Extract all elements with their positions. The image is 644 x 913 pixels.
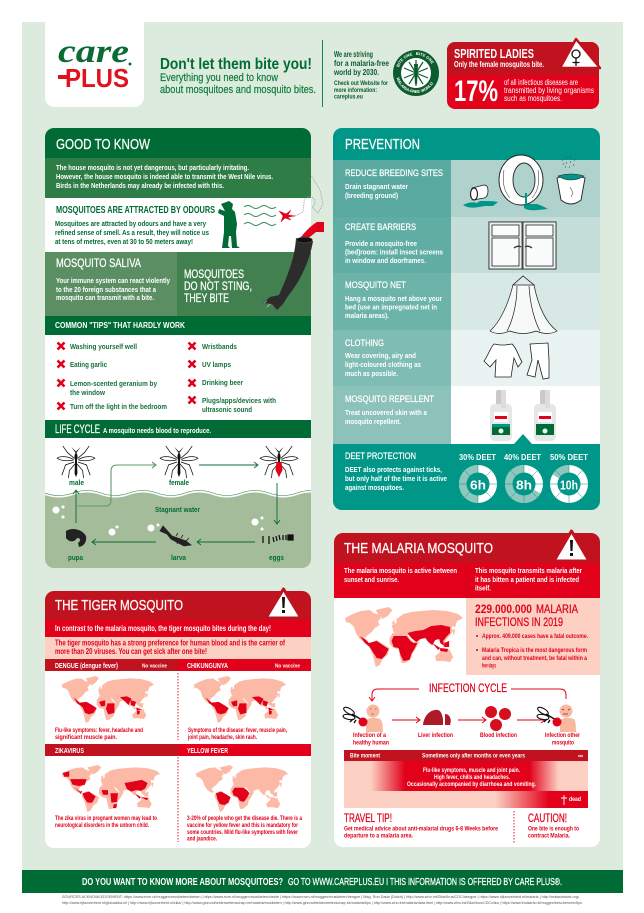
activity text: it has bitten a patient and is infected — [475, 575, 579, 584]
infection cycle labels: Infection of a — [353, 732, 386, 739]
activity text: This mosquito transmits malaria after — [475, 566, 582, 575]
icon: pupa — [66, 529, 86, 547]
heading: malaria mosquito: THE MALARIA MOSQUITO — [344, 540, 493, 557]
intro bar: In contrast to the malaria mosquito, the tiger mosquito bites during the day! — [55, 623, 271, 633]
heading: good to know: GOOD TO KNOW — [56, 136, 151, 153]
icon: odour waves — [244, 206, 276, 226]
badge: malaria-free world: BITE ONE BITE ONE — [396, 52, 434, 68]
panel: prevention — [333, 128, 600, 510]
footer banner — [22, 870, 623, 893]
list: tips that do not work: UV lamps — [202, 360, 231, 369]
saliva section — [45, 252, 311, 316]
activity text — [334, 563, 600, 598]
icon: eggs — [263, 535, 293, 544]
row: mosquito net: bed (use an impregnated net in — [345, 302, 437, 312]
list: tips that do not work: Plugs/apps/devices with — [202, 396, 276, 405]
disease: dengue: No vaccine — [142, 664, 167, 670]
callout: spirited ladies — [447, 39, 600, 109]
travel tip: Get medical advice about anti-malarial drugs 6-8 Weeks before — [344, 826, 498, 832]
life cycle labels: pupa — [68, 555, 83, 562]
life cycle labels: female — [169, 480, 189, 487]
row: deet protection — [333, 434, 600, 510]
odours section: at tens of metres, even at 30 to 50 meters away! — [55, 237, 193, 246]
timeline: Bite moment — [350, 754, 380, 760]
heading: prevention: PREVENTION — [345, 136, 420, 153]
gauge: 10 hours — [550, 465, 588, 503]
row: clothing: Wear covering, airy and — [345, 351, 416, 360]
row: mosquito repellent: Treat uncovered skin with a — [345, 408, 428, 417]
row: reduce breeding sites: (breeding ground) — [345, 191, 398, 200]
disease: yellow fever — [178, 744, 311, 842]
saliva section: DO NOT STING, — [184, 279, 252, 293]
odours section — [55, 205, 215, 246]
row: mosquito net: Hang a mosquito net above your — [345, 294, 442, 303]
icon: clothing — [484, 343, 549, 379]
timeline — [344, 750, 588, 808]
timeline: dead — [569, 796, 581, 803]
timeline: Sometimes only after months or even years — [422, 754, 526, 760]
infections statistic: Approx. 409.000 cases have a fatal outcome. — [482, 633, 588, 640]
title: Don't let them bite you! — [160, 56, 312, 73]
row: mosquito repellent — [333, 386, 600, 444]
disease: yellow fever: YELLOW FEVER — [187, 748, 228, 755]
icon: female mosquito — [160, 446, 198, 478]
panel: malaria mosquito — [334, 533, 600, 847]
heading: prevention — [333, 128, 600, 160]
sources — [62, 895, 582, 905]
callout: spirited ladies: 17% — [454, 75, 498, 108]
row: deet protection: DEET PROTECTION — [345, 451, 416, 462]
callout: spirited ladies: such as mosquitoes. — [504, 94, 562, 103]
malaria-free text: for a malaria-free — [334, 59, 389, 68]
malaria-free text — [333, 50, 389, 100]
disease: chikungunya: No vaccine — [275, 664, 300, 670]
row: clothing: light-coloured clothing as — [345, 360, 421, 369]
life cycle labels: male — [69, 480, 84, 487]
caution — [528, 813, 579, 840]
caution: CAUTION! — [528, 813, 567, 825]
travel tip: TRAVEL TIP! — [344, 813, 392, 825]
row: deet protection: against mosquitoes. — [345, 483, 404, 492]
list: tips that do not work: Turn off the light in the bedroom — [70, 402, 167, 411]
list: tips that do not work: Eating garlic — [70, 360, 107, 369]
icon: blood cells — [485, 706, 511, 731]
disease: chikungunya: Symptoms of the disease: fever, muscle pain, — [188, 727, 287, 734]
callout: spirited ladies: Only the female mosquitos bite. — [454, 60, 544, 69]
gauge: 10 hours: 10h — [560, 478, 578, 492]
infection cycle labels: Liver infection — [418, 732, 453, 739]
row: mosquito net — [333, 273, 451, 330]
intro text: The house mosquito is not yet dangerous, but particularly irritating. — [56, 163, 249, 172]
icon: mosquito net — [490, 276, 557, 334]
disease: yellow fever: vaccine for yellow fever and this is mandatory for — [187, 822, 298, 829]
row: clothing: much as possible. — [345, 369, 398, 378]
heading: infection cycle: INFECTION CYCLE — [429, 683, 507, 695]
heading: tiger mosquito: THE TIGER MOSQUITO — [55, 597, 183, 614]
saliva section: MOSQUITO SALIVA — [56, 258, 141, 270]
malaria-free text: careplus.eu — [334, 94, 363, 100]
row: clothing: CLOTHING — [345, 338, 384, 349]
malaria-free text: world by 2030. — [333, 68, 379, 77]
infections statistic: INFECTIONS IN 2019 — [475, 615, 563, 629]
row: create barriers: Provide a mosquito-free — [345, 239, 417, 248]
list: tips that do not work: Washing yourself well — [70, 342, 137, 351]
life cycle heading: A mosquito needs blood to reproduce. — [103, 426, 211, 435]
timeline: High fever, chills and headaches. — [434, 774, 510, 781]
infections statistic: and can, without treatment, be fatal within a — [482, 655, 587, 662]
row: deet protection: 30% DEET — [459, 452, 497, 462]
row: clothing — [333, 330, 600, 386]
saliva section: Your immune system can react violently — [56, 276, 171, 285]
saliva section: mosquito can transmit with a bite. — [56, 293, 154, 302]
icon: liver — [423, 710, 451, 725]
badge: malaria-free world — [393, 50, 439, 96]
list: tips that do not work — [58, 342, 276, 414]
odours section: MOSQUITOES ARE ATTRACTED BY ODOURS — [56, 205, 215, 216]
disease: dengue: DENGUE (dengue fever) — [55, 663, 118, 670]
tips heading: COMMON "TIPS" THAT HARDLY WORK — [55, 321, 185, 330]
footer banner: DO YOU WANT TO KNOW MORE ABOUT MOSQUITOES? — [82, 877, 283, 888]
preference text: The tiger mosquito has a strong preference for human blood and is the carrier of — [55, 638, 285, 648]
disease: zika: ZIKAVIRUS — [55, 748, 84, 755]
list: tips that do not work: the window — [70, 388, 105, 397]
tips heading — [45, 316, 311, 335]
saliva section: THEY BITE — [184, 291, 229, 305]
preference text — [45, 637, 311, 659]
life cycle labels — [68, 480, 284, 562]
row: create barriers: (bed)room: install insect screens — [345, 248, 443, 256]
row: create barriers — [333, 217, 600, 273]
disease: zika — [45, 744, 178, 829]
icon: warning triangle — [266, 589, 301, 618]
caution: contract Malaria. — [528, 832, 570, 840]
activity text: sunset and sunrise. — [344, 575, 399, 584]
infection cycle labels: healthy human — [353, 740, 389, 746]
malaria-free text: more information: — [334, 88, 377, 94]
icon: mosquito proboscis — [263, 222, 324, 310]
gauge: 8 hours: 8h — [516, 478, 532, 492]
sources: http://www.rijksoverheid.nl/globalzika.nl/ | http://www.rijksoverheid.nl/zika/ | http://www.gezondheidenwetenschap.be/malaria/muskieten | http://www.gezondheidenwetenschap.be/malaria/tips | http://www.who.int/malaria/data.html | http://www.who.int/ZikaVirus/CDC/zika | https://www.thuisarts.nl/muggen/beschermen/tips — [62, 901, 582, 905]
icon: window — [489, 222, 556, 269]
badge: malaria-free world: MALARIA-FREE WORLD — [396, 77, 433, 93]
odours section: Mosquitoes are attracted by odours and have a very — [55, 219, 207, 228]
row: reduce breeding sites: REDUCE BREEDING SITES — [345, 168, 443, 179]
row: deet protection: DEET also protects against ticks, — [345, 465, 442, 474]
disease: dengue: Flu-like symptoms: fever, headache and — [55, 727, 143, 734]
stagnant water: Stagnant water — [155, 505, 200, 514]
disease: yellow fever: some countries. Mild flu-like symptoms with fever — [187, 829, 298, 836]
logo: Care Plus — [45, 22, 144, 107]
callout: spirited ladies: SPIRITED LADIES — [454, 46, 534, 61]
sources: SOURCES ACKNOWLEDGEMENT: https://www.rivm.nl/muggen/muskieten/steken | https://www.rivm.nl/muggen/muskieten/ziekte | https://www.rivm.nl/muggen/muskieten/dengue | Mag. Ron Dada (Dutch) | http://www.who.int/ZikaVirus/CDC/dengue | https://www.rijksoverheid.nl/malaria | http://malariafacts.org/ — [62, 895, 579, 899]
timeline: Flu-like symptoms, muscle and joint pain. — [423, 767, 520, 774]
disease: dengue — [45, 659, 178, 741]
travel tip — [344, 813, 498, 840]
activity text: The malaria mosquito is active between — [344, 566, 457, 575]
icon: larva — [160, 526, 191, 546]
preference text: more than 20 viruses. You can get sick after one bite! — [55, 647, 207, 656]
malaria-free text: We are striving — [334, 50, 373, 59]
infection cycle labels: Infection other — [545, 732, 580, 739]
icon: female symbol warning triangle — [560, 39, 600, 68]
life cycle heading: LIFE CYCLE — [55, 424, 100, 436]
intro text: However, the house mosquito is indeed able to transmit the West Nile virus. — [56, 172, 273, 181]
icon: male mosquito — [57, 446, 95, 478]
icon: odour mosquito and flight path — [279, 175, 323, 222]
disease: chikungunya: CHIKUNGUNYA — [187, 663, 228, 670]
gauge: 6 hours — [459, 465, 497, 503]
saliva section: to the 20 foreign substances that a — [56, 285, 157, 294]
infection cycle labels: Blood infection — [480, 732, 517, 739]
row: mosquito net: malaria areas). — [345, 311, 389, 320]
travel tip: departure to a malaria area. — [344, 832, 413, 840]
infections statistic — [466, 598, 600, 675]
intro bar — [45, 620, 311, 637]
icon: healthy human bitten — [343, 704, 383, 732]
list: tips that do not work: Lemon-scented geranium by — [70, 379, 158, 388]
stagnant water — [45, 490, 325, 568]
activity text: itself. — [475, 584, 491, 592]
odours section: refined sense of smell. As a result, they will notice us — [55, 228, 209, 237]
list: tips that do not work: Drinking beer — [202, 378, 243, 387]
infection cycle labels — [353, 732, 580, 746]
title — [160, 56, 316, 96]
icon: person smelling — [218, 201, 240, 248]
intro text: Birds in the Netherlands may already be infected with this. — [56, 181, 224, 190]
life cycle heading — [45, 420, 311, 438]
row: deet protection: 50% DEET — [550, 452, 589, 462]
saliva section: MOSQUITOES — [184, 267, 244, 281]
gauge: 6 hours: 6h — [470, 478, 486, 492]
caution: One bite is enough to — [528, 826, 579, 832]
row: mosquito net: MOSQUITO NET — [345, 280, 406, 291]
infection cycle labels: mosquito — [552, 740, 574, 746]
timeline: Occasionally accompanied by diarrhoea and vomiting. — [407, 781, 536, 788]
row: mosquito repellent: mosquito repellent. — [345, 417, 401, 426]
disease: dengue: significant muscle pain. — [55, 734, 117, 741]
disease: zika: neurological disorders in the unborn child. — [55, 822, 149, 829]
disease: zika: The zika virus in pregnant women may lead to — [55, 815, 157, 822]
row: mosquito repellent: MOSQUITO REPELLENT — [345, 394, 434, 405]
timeline: ∞ — [578, 753, 583, 760]
icon: can, tire and pot with water — [463, 155, 585, 210]
intro text — [45, 158, 311, 198]
infections statistic: few days — [482, 662, 496, 670]
logo: Care Plus: care — [58, 34, 129, 70]
map: malaria world map — [334, 598, 466, 675]
icon: malaria warning triangle — [554, 531, 589, 561]
life cycle labels: eggs — [269, 555, 284, 562]
disease: yellow fever: 3-20% of people who get the disease die. There is a — [187, 815, 302, 822]
infections statistic: 229.000.000 — [475, 602, 532, 616]
disease: chikungunya — [178, 659, 311, 741]
row: reduce breeding sites: Drain stagnant water — [345, 182, 408, 191]
heading: malaria mosquito — [334, 533, 600, 563]
list: tips that do not work: ultrasonic sound — [202, 405, 252, 414]
callout: spirited ladies: transmitted by living organisms — [504, 86, 594, 95]
infections statistic: MALARIA — [536, 602, 578, 616]
disease: yellow fever: and jaundice. — [187, 836, 217, 842]
row: deet protection: 40% DEET — [504, 452, 542, 462]
arrows: life cycle — [73, 462, 280, 545]
malaria-free text: Check out Website for — [334, 81, 389, 87]
title: about mosquitoes and mosquito bites. — [160, 84, 316, 96]
arrows: infection cycle — [369, 689, 566, 723]
life cycle labels: larva — [171, 555, 186, 562]
row: create barriers: CREATE BARRIERS — [345, 222, 416, 233]
icon: infected human bitten — [537, 704, 576, 732]
callout: spirited ladies: of all infectious diseases are — [504, 78, 578, 87]
icon: repellent bottles — [490, 390, 556, 441]
gauge: 8 hours — [505, 465, 543, 503]
list: tips that do not work: Wristbands — [202, 342, 237, 351]
logo: Care Plus: PLUS — [65, 63, 129, 93]
row: deet protection: but only half of the time it is active — [345, 474, 447, 483]
disease: chikungunya: joint pain, headache, skin rash. — [187, 734, 257, 741]
title: Everything you need to know — [160, 72, 278, 84]
infections statistic: Malaria Tropica is the most dangerous form — [482, 647, 587, 654]
panel: good to know — [45, 128, 325, 568]
row: reduce breeding sites — [333, 160, 600, 217]
panel: tiger mosquito — [45, 591, 311, 848]
icon: blood-fed mosquito — [260, 446, 298, 478]
row: create barriers: in window and doorframes. — [345, 256, 426, 265]
